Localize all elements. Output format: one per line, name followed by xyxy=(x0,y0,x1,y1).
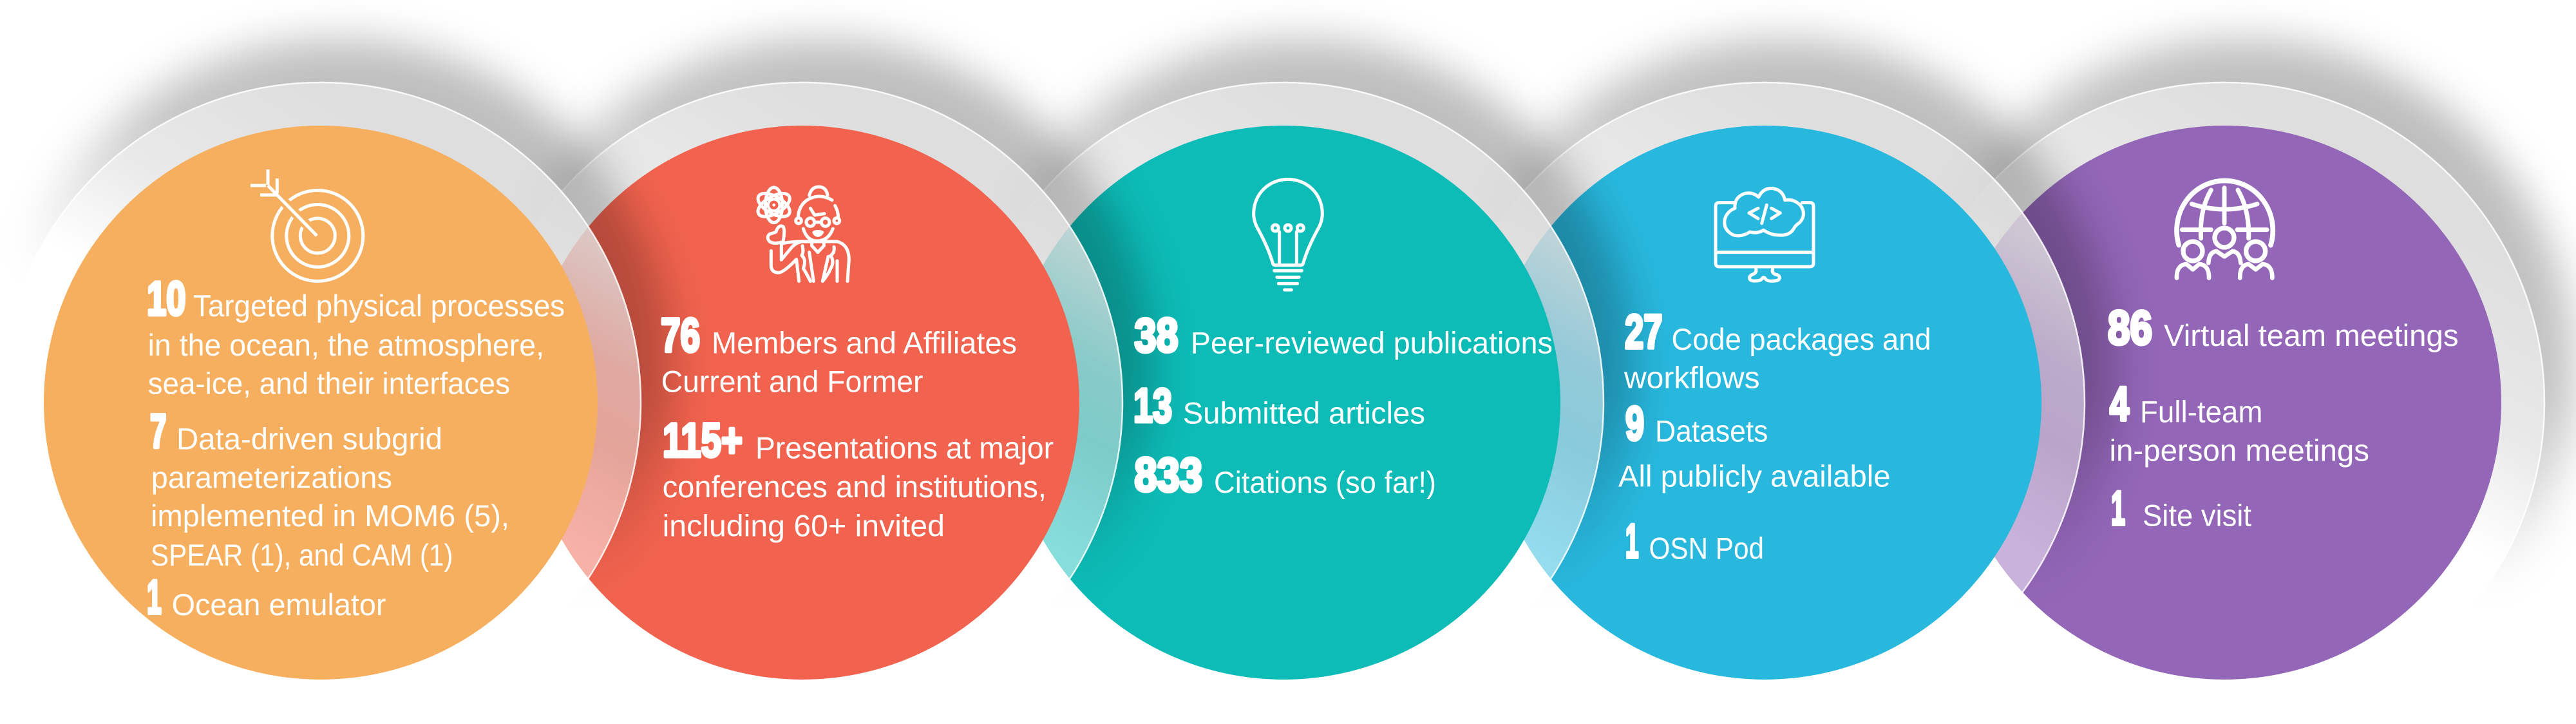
stat: 1 OSN pod xyxy=(1625,514,1764,568)
stat: 9 datasets publicly available: Datasets xyxy=(1655,414,1768,448)
stat: 10 targeted physical processes: in the ocean, the atmosphere, xyxy=(148,328,544,362)
panel: meetings (purple circle) xyxy=(1974,17,2576,680)
stat: 86 virtual team meetings: Virtual team meetings xyxy=(2164,318,2459,352)
stat: 7 data-driven subgrid parameterizations: 7 xyxy=(150,405,166,458)
stat: 115+ presentations: 115+ xyxy=(663,414,743,467)
stat: 10 targeted physical processes: sea-ice, and their interfaces xyxy=(148,366,510,401)
stat: 833 citations: Citations (so far!) xyxy=(1214,465,1436,499)
panel: code and data (blue circle) xyxy=(1444,39,2116,723)
blue circle xyxy=(1488,126,2041,680)
stat: 9 datasets publicly available: 9 xyxy=(1625,397,1644,450)
content: code and data xyxy=(1618,188,1931,568)
teal circle xyxy=(1007,126,1560,680)
panel: science targets (orange circle) xyxy=(1,39,672,723)
stat: 76 members and affiliates xyxy=(661,309,1017,399)
stat: 76 members and affiliates: 76 xyxy=(661,309,700,362)
icon: globe with team xyxy=(2177,180,2273,278)
stat: 9 datasets publicly available: All publicly available xyxy=(1618,459,1891,493)
stat: 1 ocean emulator: Ocean emulator xyxy=(172,587,386,622)
stat: 7 data-driven subgrid parameterizations xyxy=(150,405,509,572)
stat: 7 data-driven subgrid parameterizations: implemented in MOM6 (5), xyxy=(151,499,509,533)
stat: 1 OSN pod: 1 xyxy=(1625,514,1638,568)
stat: 7 data-driven subgrid parameterizations: SPEAR (1), and CAM (1) xyxy=(151,538,453,572)
stat: 7 data-driven subgrid parameterizations: parameterizations xyxy=(151,461,392,495)
stat: 10 targeted physical processes: 10 xyxy=(147,272,185,325)
red circle xyxy=(526,126,1079,680)
panel: publications (teal circle) xyxy=(963,39,1634,723)
teal circle outer ring xyxy=(963,82,1604,723)
stat: 13 submitted articles: 13 xyxy=(1133,379,1172,432)
stat: 27 code packages and workflows xyxy=(1624,305,1931,394)
stat: 4 full-team in-person meetings xyxy=(2110,377,2369,467)
purple circle outer ring xyxy=(1904,82,2544,723)
content: meetings xyxy=(2108,180,2459,535)
stat: 1 site visit: 1 xyxy=(2111,482,2125,535)
stat: 38 peer-reviewed publications xyxy=(1135,309,1553,362)
stat: 1 ocean emulator xyxy=(147,571,386,624)
stat: 4 full-team in-person meetings: 4 xyxy=(2110,377,2129,430)
stat: 1 OSN pod: OSN Pod xyxy=(1649,531,1764,566)
red circle outer ring xyxy=(482,82,1122,723)
stat: 115+ presentations xyxy=(663,414,1054,542)
stat: 38 peer-reviewed publications: 38 xyxy=(1135,309,1179,362)
stat: 27 code packages and workflows: Code packages and xyxy=(1672,322,1931,356)
stat: 10 targeted physical processes xyxy=(147,272,565,401)
orange circle outer ring xyxy=(1,82,641,723)
stat: 13 submitted articles xyxy=(1133,379,1425,432)
stat: 76 members and affiliates: Current and Former xyxy=(661,365,923,399)
stat: 9 datasets publicly available xyxy=(1618,397,1891,493)
content: publications xyxy=(1133,179,1553,501)
icon: monitor with cloud code xyxy=(1716,188,1814,281)
content: people and presentations xyxy=(661,187,1054,542)
icon: scientist holding atom xyxy=(754,187,849,281)
stat: 86 virtual team meetings xyxy=(2108,301,2459,354)
stat: 7 data-driven subgrid parameterizations: Data-driven subgrid xyxy=(176,421,442,455)
stat: 13 submitted articles: Submitted articles xyxy=(1183,395,1425,430)
stat: 1 ocean emulator: 1 xyxy=(147,571,162,624)
stat: 833 citations xyxy=(1135,448,1436,501)
stat: 4 full-team in-person meetings: Full-team xyxy=(2140,394,2262,428)
stat: 115+ presentations: including 60+ invited xyxy=(663,508,945,542)
stat: 38 peer-reviewed publications: Peer-reviewed publications xyxy=(1191,326,1553,359)
stat: 1 site visit xyxy=(2111,482,2251,535)
stat: 27 code packages and workflows: 27 xyxy=(1625,305,1662,358)
panel: people and presentations (red circle) xyxy=(482,39,1153,723)
icon: light bulb xyxy=(1254,179,1322,290)
stat: 76 members and affiliates: Members and Affiliates xyxy=(712,326,1017,359)
stat: 115+ presentations: conferences and institutions, xyxy=(663,470,1046,504)
content: science targets xyxy=(147,169,565,624)
icon: target with arrow xyxy=(251,169,363,281)
stat: 10 targeted physical processes: Targeted physical processes xyxy=(193,289,565,323)
stat: 27 code packages and workflows: workflows xyxy=(1624,361,1760,394)
stat: 833 citations: 833 xyxy=(1135,448,1202,501)
orange circle xyxy=(44,126,598,680)
stat: 115+ presentations: Presentations at major xyxy=(755,430,1054,465)
stat: 4 full-team in-person meetings: in-person meetings xyxy=(2110,433,2369,467)
stat: 86 virtual team meetings: 86 xyxy=(2108,301,2152,354)
stat: 1 site visit: Site visit xyxy=(2143,499,2251,532)
purple circle xyxy=(1947,126,2501,680)
blue circle outer ring xyxy=(1444,82,2085,723)
